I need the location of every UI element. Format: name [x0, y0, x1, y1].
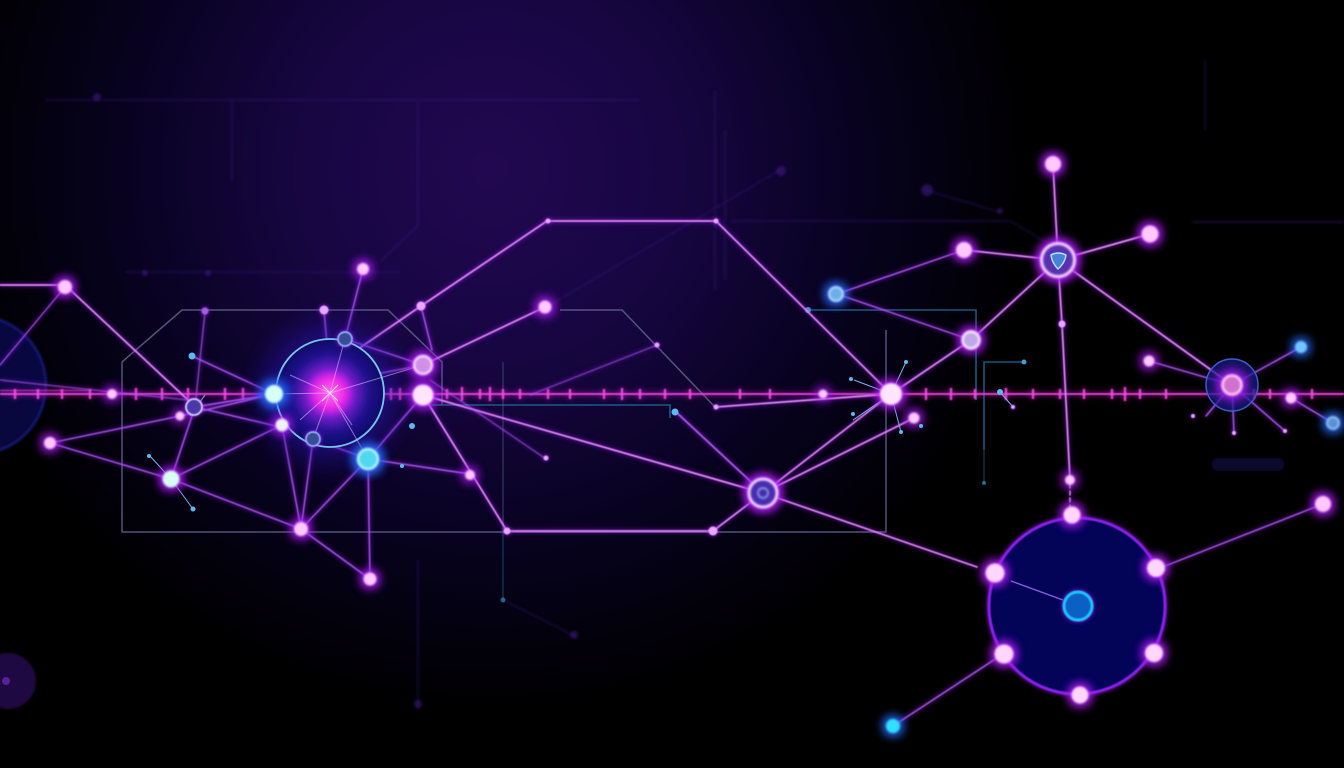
icon: compass ring node [749, 479, 777, 507]
blue sparks [150, 362, 1013, 509]
ring icon nodes [186, 244, 1339, 507]
bottom right ring hub [986, 506, 1165, 704]
icon: small ring node bottom [306, 432, 320, 446]
icon: small ring node top [338, 332, 352, 346]
top polyline [345, 221, 891, 394]
thinner purple connections [0, 250, 1333, 726]
icon: gear node [186, 399, 202, 415]
icon: blue node [829, 287, 843, 301]
horizontal signal line [0, 387, 1344, 401]
hub core [1064, 592, 1092, 620]
ring nodes [986, 506, 1165, 704]
small joint nodes [202, 218, 1287, 536]
grey circuit frame [122, 310, 886, 532]
mint node [162, 470, 180, 488]
dim corner node [0, 653, 36, 709]
icon: right halo node [1206, 359, 1258, 411]
icon: ring node near hub [414, 356, 432, 374]
dim arrow [1212, 458, 1284, 471]
teal circuit traces [430, 310, 1024, 600]
central hub [238, 301, 423, 485]
large bright nodes [44, 156, 1331, 586]
icon: white ring node [962, 332, 980, 348]
cyan nodes [265, 341, 1307, 733]
faint background nodes [93, 93, 1003, 708]
icon: shield ring node [1042, 244, 1074, 276]
hub spoke [1011, 581, 1063, 600]
icon: cyan ring node [358, 449, 378, 469]
icon: right blue ring node [1327, 417, 1339, 429]
main purple connections [0, 164, 1232, 567]
blue halos behind cyan nodes [260, 380, 382, 473]
left blue ring node [0, 316, 46, 454]
small blue nodes [147, 352, 1003, 512]
